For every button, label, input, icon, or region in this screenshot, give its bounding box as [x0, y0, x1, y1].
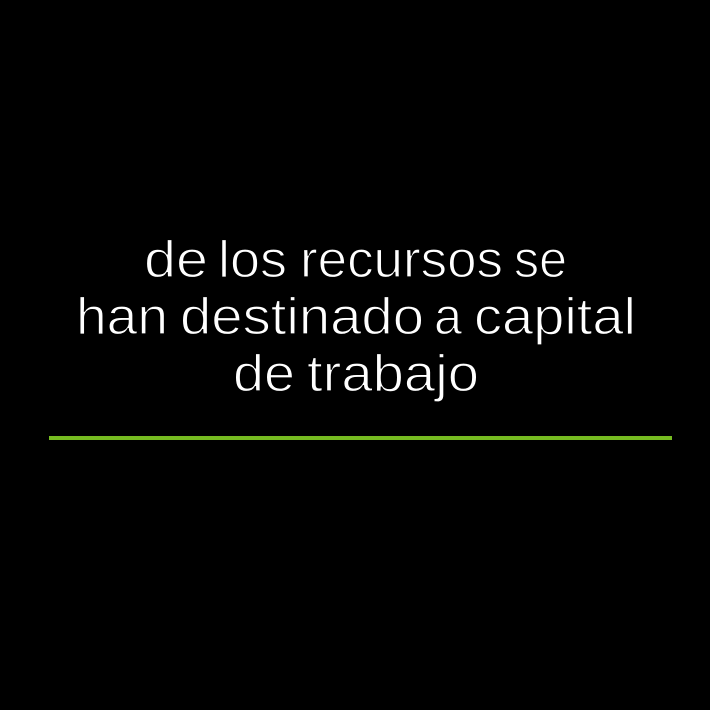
green rule — [49, 436, 672, 440]
text block: main statement: se — [514, 231, 567, 289]
text block: main statement: recursos — [300, 231, 503, 289]
text block: main statement: capital — [474, 288, 636, 346]
text block: main statement: de — [144, 231, 208, 289]
text block: main statement: trabajo — [307, 345, 479, 403]
text block: main statement: destinado — [180, 288, 424, 346]
text block: main statement — [76, 231, 636, 403]
text block: main statement: los — [218, 231, 287, 289]
text block: main statement: a — [434, 288, 462, 346]
text block: main statement: han — [76, 288, 168, 346]
text block: main statement: de — [233, 345, 295, 403]
